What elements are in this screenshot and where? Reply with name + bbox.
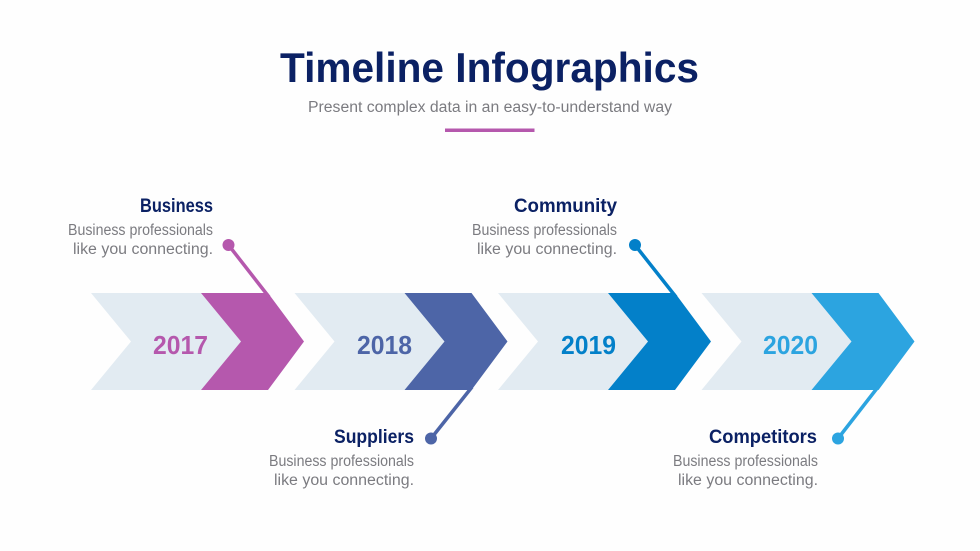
step: 2019 Community	[472, 195, 711, 390]
light chevron 2017	[91, 293, 241, 390]
title: Timeline Infographics	[280, 44, 699, 91]
dark chevron 2019	[608, 293, 711, 390]
heading Community: Community	[514, 195, 617, 217]
connector 2017	[222, 239, 269, 297]
dark chevron 2017	[201, 293, 304, 390]
body Business: like you connecting.	[73, 241, 213, 258]
title underline	[445, 128, 534, 132]
year 2018: 2018	[357, 330, 412, 360]
heading Business: Business	[140, 195, 213, 217]
body Community	[472, 222, 617, 258]
connector 2019	[629, 239, 676, 297]
body Competitors: Business professionals	[673, 453, 818, 470]
body Suppliers: like you connecting.	[274, 472, 414, 489]
dark chevron 2020	[812, 293, 914, 390]
body Suppliers	[269, 453, 414, 489]
step: 2017 Business	[68, 195, 304, 390]
body Business	[68, 222, 213, 258]
heading Suppliers: Suppliers	[334, 426, 414, 448]
body Suppliers: Business professionals	[269, 453, 414, 470]
light chevron 2020	[702, 293, 852, 390]
body Competitors: like you connecting.	[678, 472, 818, 489]
step: 2018 Suppliers	[269, 293, 508, 489]
dark chevron 2018	[404, 293, 508, 390]
connector 2020	[832, 387, 878, 444]
year 2020: 2020	[763, 330, 818, 360]
body Competitors	[673, 453, 818, 489]
body Community: like you connecting.	[477, 241, 617, 258]
body Business: Business professionals	[68, 222, 213, 239]
subtitle: Present complex data in an easy-to-understand way	[308, 99, 672, 116]
year 2019: 2019	[561, 330, 616, 360]
light chevron 2019	[498, 293, 648, 390]
heading Competitors: Competitors	[709, 426, 817, 448]
step: 2020 Competitors	[673, 293, 914, 489]
connector 2018	[425, 387, 472, 444]
light chevron 2018	[294, 293, 444, 390]
body Community: Business professionals	[472, 222, 617, 239]
year 2017: 2017	[153, 330, 208, 360]
